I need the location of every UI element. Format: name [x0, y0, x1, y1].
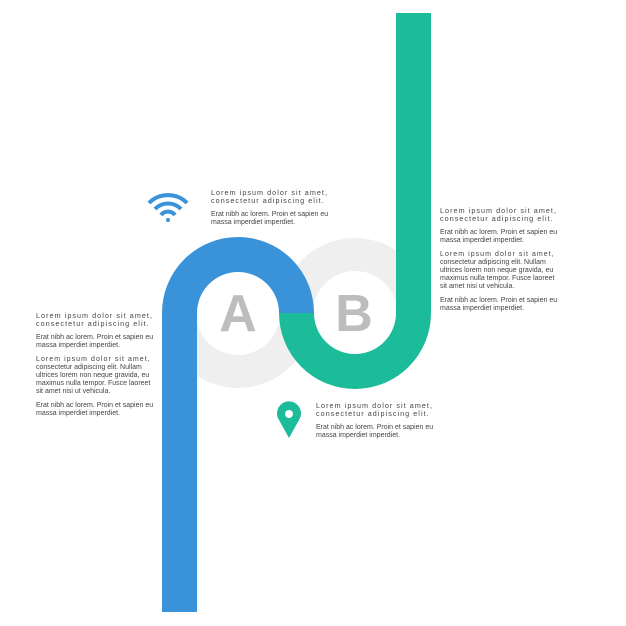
- icon: wifi: [149, 195, 187, 222]
- text block: right: massa imperdiet imperdiet.: [440, 305, 524, 312]
- text block: left: sit amet nisi ut vehicula.: [36, 388, 110, 395]
- text block: left: Lorem ipsum dolor sit amet,: [36, 311, 153, 320]
- text block: pin: consectetur adipiscing elit.: [316, 409, 430, 418]
- text block: left: maximus nulla tempor. Fusce laoreet: [36, 380, 150, 387]
- text block: right: Erat nibh ac lorem. Proin et sapien eu: [440, 229, 557, 236]
- text block: right: Erat nibh ac lorem. Proin et sapien eu: [440, 297, 557, 304]
- text block: left: Lorem ipsum dolor sit amet,: [36, 356, 151, 363]
- text block: left: massa imperdiet imperdiet.: [36, 410, 120, 417]
- text block: left: Erat nibh ac lorem. Proin et sapien eu: [36, 402, 153, 409]
- text block: left: Erat nibh ac lorem. Proin et sapien eu: [36, 334, 153, 341]
- text block: left: [36, 311, 153, 417]
- text block: pin: Lorem ipsum dolor sit amet,: [316, 401, 433, 410]
- text block: wifi: Lorem ipsum dolor sit amet,: [211, 188, 328, 197]
- text block: wifi: massa imperdiet imperdiet.: [211, 219, 295, 226]
- text block: wifi: [211, 188, 328, 226]
- text block: pin: Erat nibh ac lorem. Proin et sapien eu: [316, 424, 433, 431]
- text block: right: consectetur adipiscing elit. Nullam: [440, 259, 546, 266]
- text block: left: consectetur adipiscing elit. Nullam: [36, 364, 142, 371]
- text block: wifi: consectetur adipiscing elit.: [211, 196, 325, 205]
- icon: location pin: [277, 401, 301, 438]
- text block: pin: massa imperdiet imperdiet.: [316, 432, 400, 439]
- letter B: B: [335, 285, 373, 343]
- circle background B: [280, 238, 430, 388]
- text block: right: consectetur adipiscing elit.: [440, 214, 554, 223]
- text block: left: consectetur adipiscing elit.: [36, 319, 150, 328]
- text block: wifi: Erat nibh ac lorem. Proin et sapien eu: [211, 211, 328, 218]
- text block: right: massa imperdiet imperdiet.: [440, 237, 524, 244]
- text block: pin: [316, 401, 433, 439]
- text block: right: Lorem ipsum dolor sit amet,: [440, 251, 555, 258]
- text block: right: ultrices lorem non neque gravida, eu: [440, 267, 553, 274]
- text block: left: massa imperdiet imperdiet.: [36, 342, 120, 349]
- letter A: A: [219, 285, 257, 343]
- text block: right: maximus nulla tempor. Fusce laoreet: [440, 275, 554, 282]
- text block: right: sit amet nisi ut vehicula.: [440, 283, 514, 290]
- text block: right: Lorem ipsum dolor sit amet,: [440, 206, 557, 215]
- blue road: [180, 255, 296, 612]
- text block: left: ultrices lorem non neque gravida, eu: [36, 372, 149, 379]
- green road: [296, 13, 414, 372]
- text block: right: [440, 206, 557, 312]
- circle background A: [163, 238, 313, 388]
